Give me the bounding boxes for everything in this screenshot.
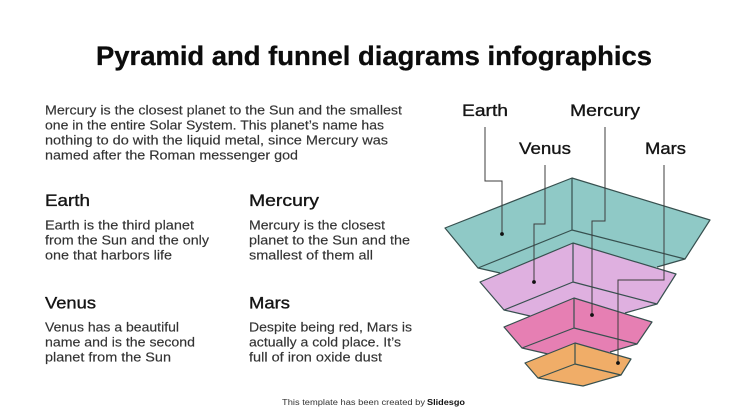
panel: Mars: full of iron oxide dust: [249, 350, 382, 364]
label: Earth: Earth: [462, 101, 508, 120]
intro text block: one in the entire Solar System. This planet’s name has: [45, 118, 385, 132]
panel: Earth: Earth: [45, 192, 90, 210]
funnel diagram: [445, 178, 710, 386]
funnel layer: teal (Earth): [445, 178, 710, 282]
footer credit: Slidesgo: [427, 398, 465, 407]
funnel layer: lilac (Venus): [480, 243, 676, 320]
leader line: Mercury: [590, 127, 605, 317]
panel: Mercury: Mercury: [249, 192, 320, 210]
panel: Mars: Despite being red, Mars is: [249, 320, 413, 334]
panel: Mercury: smallest of them all: [249, 248, 373, 262]
intro text block: nothing to do with the liquid metal, since Mercury was: [45, 132, 389, 148]
funnel layer: orange (Mars): [525, 343, 631, 386]
panel: Venus: [45, 294, 195, 364]
leader line: Earth: [485, 127, 504, 236]
funnel layer: pink (Mercury): [504, 298, 652, 358]
panel: Venus: planet from the Sun: [45, 350, 171, 364]
leader line: Venus: [532, 165, 545, 284]
label: Venus: Venus: [519, 139, 571, 158]
panel: Mars: [249, 294, 413, 364]
panel: Venus: Venus has a beautiful: [45, 320, 179, 334]
panel: Earth: from the Sun and the only: [45, 232, 210, 248]
footer credit: [282, 398, 465, 407]
label: Mercury: Mercury: [570, 101, 641, 120]
footer credit: This template has been created by: [282, 398, 425, 407]
panel: Mars: actually a cold place. It’s: [249, 334, 402, 350]
title: Pyramid and funnel diagrams infographics: [96, 41, 652, 71]
intro text block: [45, 102, 402, 162]
label: Mars: Mars: [645, 139, 686, 158]
panel: Earth: one that harbors life: [45, 248, 172, 262]
panel: Mars: Mars: [249, 294, 290, 312]
intro text block: named after the Roman messenger god: [45, 148, 298, 162]
leader line: Mars: [616, 165, 664, 365]
panel: Mercury: [249, 192, 410, 262]
intro text block: Mercury is the closest planet to the Sun and the smallest: [45, 102, 402, 118]
panel: Earth: [45, 192, 210, 262]
panel: Venus: name and is the second: [45, 334, 195, 350]
panel: Mercury: planet to the Sun and the: [249, 232, 410, 248]
panel: Mercury: Mercury is the closest: [249, 218, 385, 232]
panel: Earth: Earth is the third planet: [45, 218, 194, 232]
panel: Venus: Venus: [45, 294, 96, 312]
